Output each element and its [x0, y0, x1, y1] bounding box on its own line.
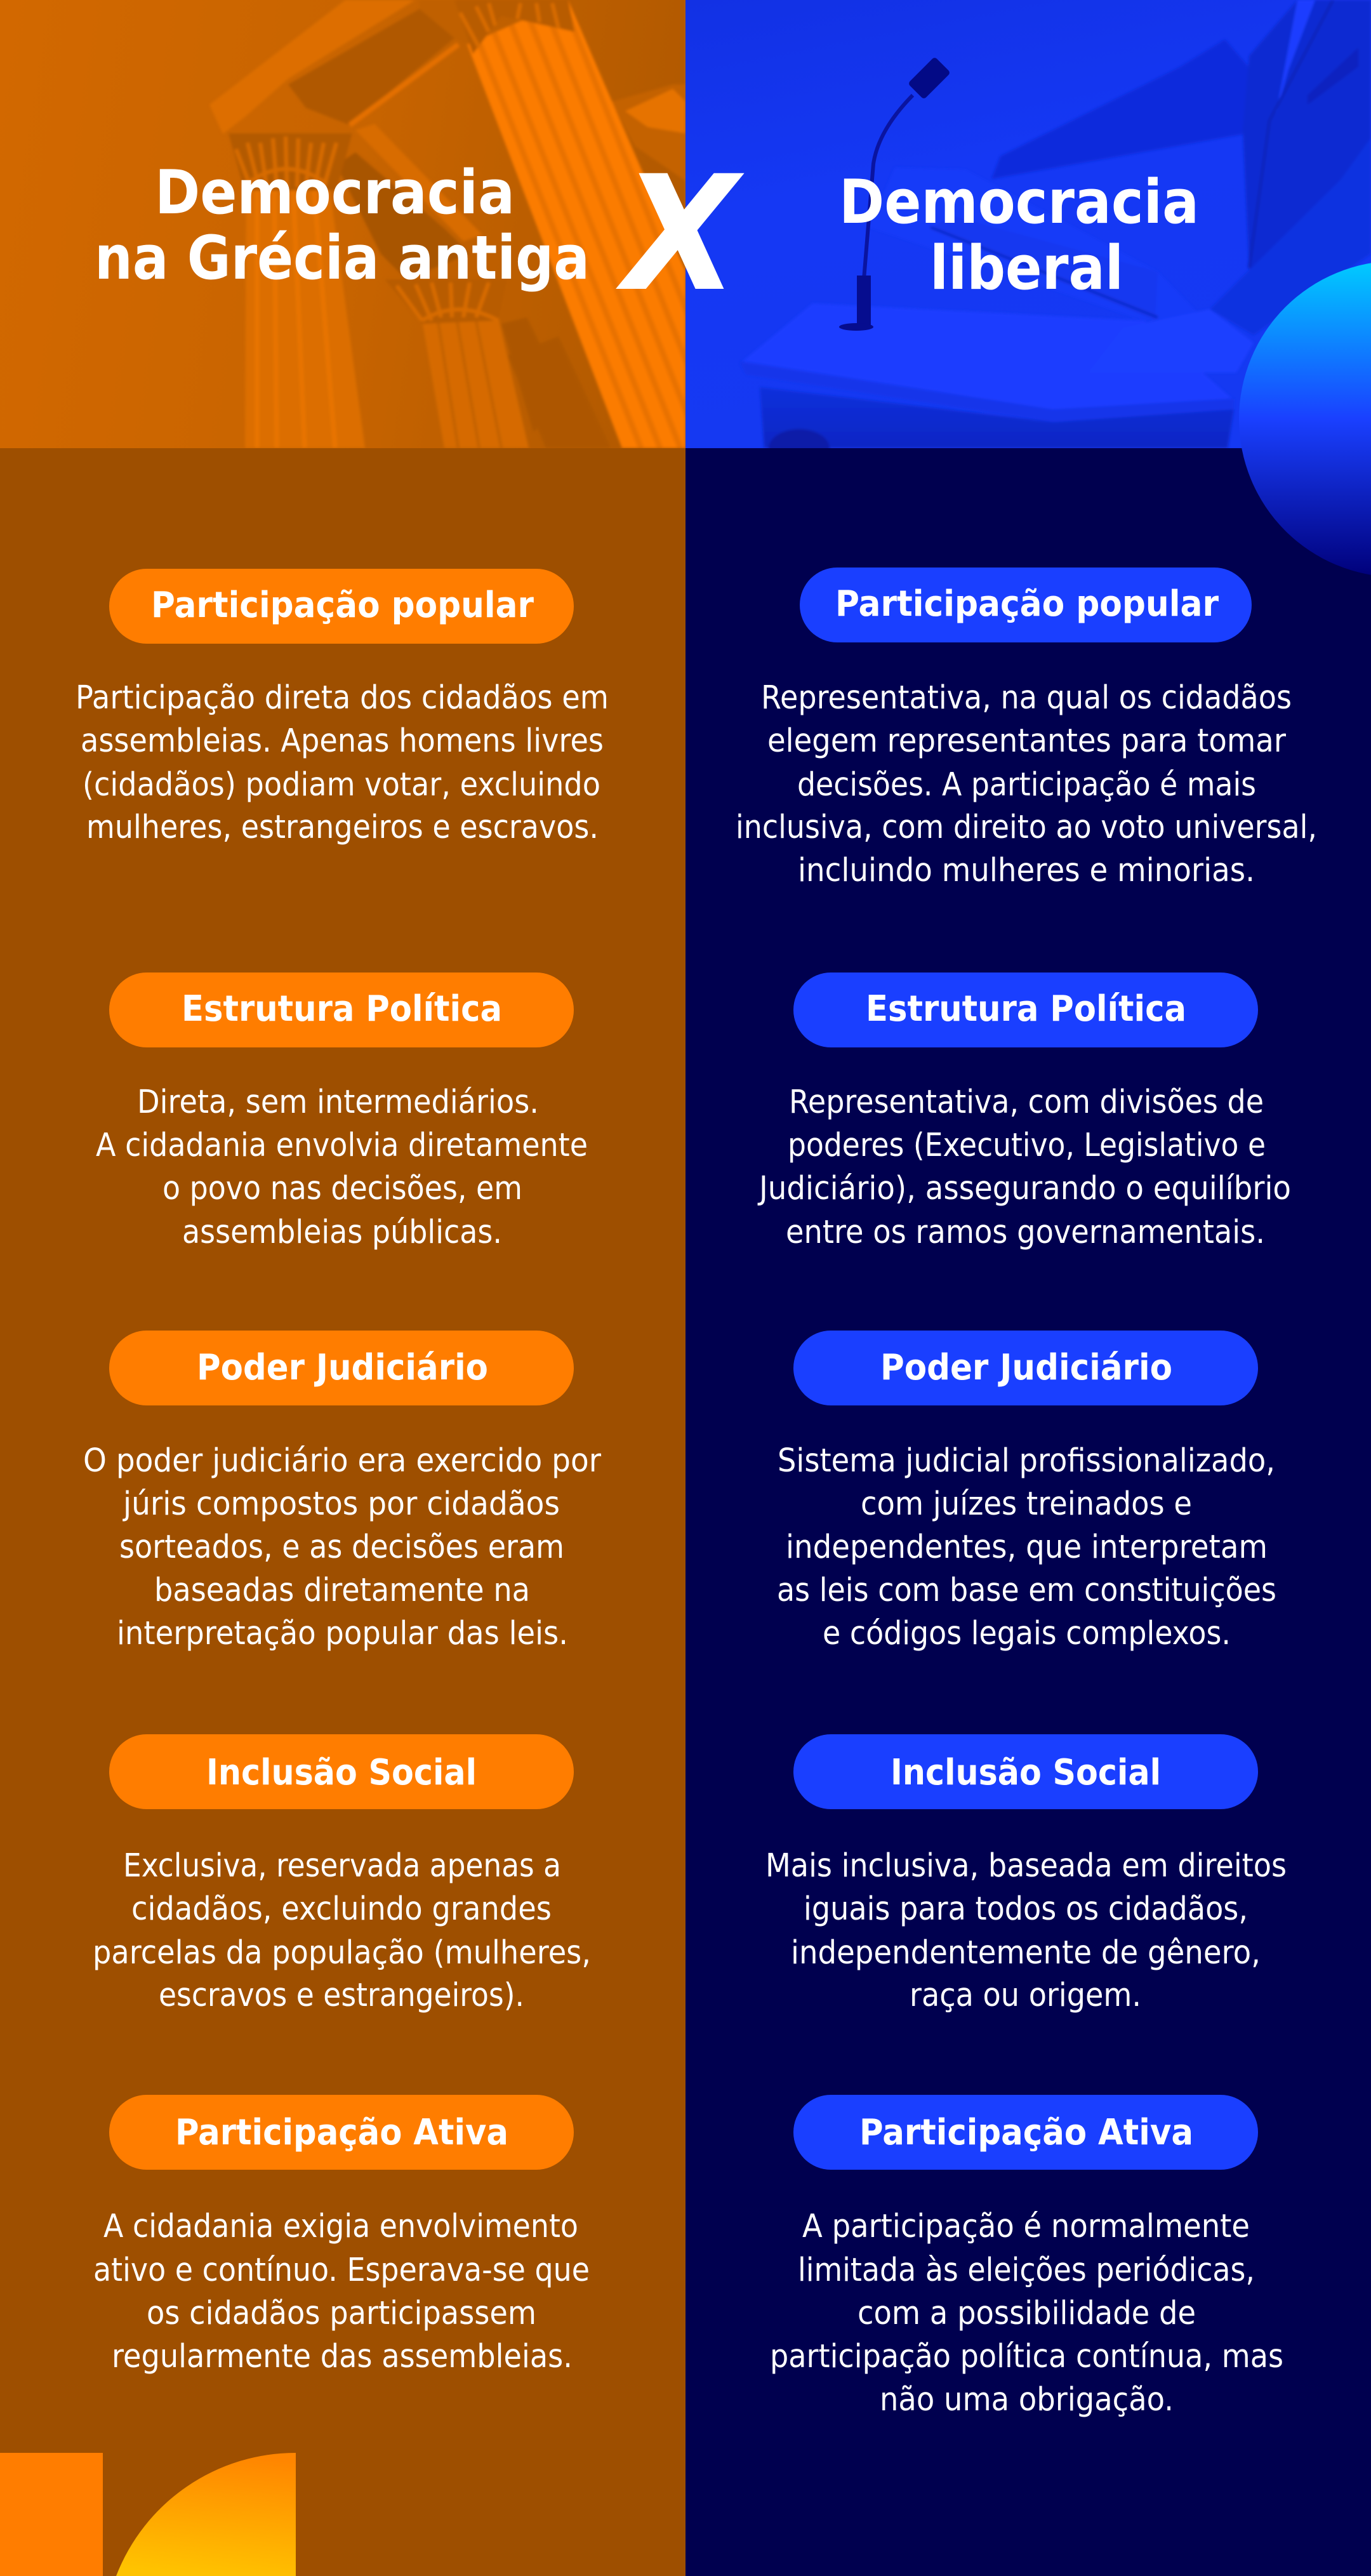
title: left: na Grécia antiga: [95, 223, 590, 293]
text block: baseadas diretamente na: [154, 1572, 530, 1609]
pill heading: [109, 2095, 574, 2170]
text block: [757, 1084, 1291, 1251]
title: left: [95, 158, 590, 293]
text block: com a possibilidade de: [858, 2295, 1196, 2332]
text block: A cidadania exigia envolvimento: [103, 2208, 578, 2245]
text block: [765, 1847, 1287, 2014]
text block: independentes, que interpretam: [786, 1529, 1268, 1566]
text block: interpretação popular das leis.: [117, 1615, 568, 1652]
text block: Mais inclusiva, baseada em direitos: [765, 1847, 1287, 1885]
pill heading: Estrutura Política: [182, 988, 502, 1030]
text block: com juízes treinados e: [861, 1485, 1192, 1523]
text block: [93, 1847, 591, 2014]
panel: left 5 participação ativa: [93, 2095, 590, 2375]
pill heading: [793, 973, 1258, 1047]
decorative gradient circle: [1239, 261, 1371, 577]
pill heading: [109, 1734, 574, 1809]
text block: os cidadãos participassem: [147, 2295, 536, 2332]
text block: O poder judiciário era exercido por: [83, 1442, 601, 1480]
text block: assembleias. Apenas homens livres: [81, 722, 604, 760]
text block: cidadãos, excluindo grandes: [131, 1890, 552, 1928]
text block: decisões. A participação é mais: [797, 766, 1256, 804]
text block: escravos e estrangeiros).: [159, 1977, 524, 2014]
text block: parcelas da população (mulheres,: [93, 1934, 591, 1972]
text block: assembleias públicas.: [182, 1214, 502, 1251]
pill heading: Participação Ativa: [859, 2112, 1193, 2153]
text block: Representativa, com divisões de: [789, 1084, 1264, 1121]
panel: right column background: [686, 0, 1371, 2576]
pill heading: Participação popular: [835, 583, 1219, 625]
title: left: Democracia: [155, 158, 515, 228]
text block: iguais para todos os cidadãos,: [804, 1890, 1248, 1928]
header photo: speaker at podium: [686, 0, 1371, 467]
text block: inclusiva, com direito ao voto universal,: [736, 809, 1317, 846]
title: right: [839, 168, 1199, 303]
text block: [93, 2208, 590, 2375]
text block: A cidadania envolvia diretamente: [96, 1127, 588, 1164]
pill heading: [800, 568, 1252, 642]
text block: sorteados, e as decisões eram: [119, 1529, 564, 1566]
text block: júris compostos por cidadãos: [123, 1485, 560, 1523]
pill heading: Inclusão Social: [891, 1752, 1161, 1793]
panel: left column background: [0, 0, 686, 2576]
decorative orange square: [0, 2453, 103, 2576]
text block: A participação é normalmente: [802, 2208, 1250, 2245]
text block: e códigos legais complexos.: [823, 1615, 1231, 1652]
text block: Participação direta dos cidadãos em: [76, 679, 609, 717]
title: right: liberal: [930, 234, 1123, 303]
text block: o povo nas decisões, em: [162, 1170, 522, 1207]
text block: Representativa, na qual os cidadãos: [761, 679, 1292, 717]
text block: [736, 679, 1317, 889]
text block: [96, 1084, 588, 1251]
panel: left 4 inclusão social: [93, 1734, 591, 2014]
text block: raça ou origem.: [910, 1977, 1141, 2014]
panel: right 2 estrutura política: [757, 973, 1291, 1251]
panel: right 4 inclusão social: [765, 1734, 1287, 2014]
text block: [770, 2208, 1283, 2419]
pill heading: Poder Judiciário: [197, 1347, 488, 1388]
pill heading: [793, 1734, 1258, 1809]
pill heading: Inclusão Social: [206, 1752, 477, 1793]
text block: incluindo mulheres e minorias.: [798, 852, 1255, 889]
text block: [76, 679, 609, 846]
text block: mulheres, estrangeiros e escravos.: [86, 809, 599, 846]
panel: right 1 participação popular: [736, 568, 1317, 889]
panel: left 3 poder judiciário: [83, 1331, 601, 1652]
text block: limitada às eleições periódicas,: [798, 2252, 1255, 2289]
text block: Direta, sem intermediários.: [137, 1084, 539, 1121]
pill heading: [793, 2095, 1258, 2170]
panel: right 5 participação ativa: [770, 2095, 1283, 2419]
panel: left 2 estrutura política: [96, 973, 588, 1251]
text block: independentemente de gênero,: [791, 1934, 1261, 1972]
pill heading: [109, 569, 574, 644]
text block: [777, 1442, 1276, 1652]
pill heading: [793, 1331, 1258, 1405]
title: right: Democracia: [839, 168, 1199, 237]
text block: Sistema judicial profissionalizado,: [778, 1442, 1275, 1480]
text block: participação política contínua, mas: [770, 2338, 1283, 2375]
text block: Exclusiva, reservada apenas a: [123, 1847, 561, 1885]
text block: ativo e contínuo. Esperava-se que: [93, 2252, 590, 2289]
text block: (cidadãos) podiam votar, excluindo: [83, 766, 600, 804]
pill heading: Participação popular: [151, 585, 534, 626]
text block: [83, 1442, 601, 1652]
text block: entre os ramos governamentais.: [786, 1214, 1265, 1251]
text block: não uma obrigação.: [880, 2381, 1174, 2419]
pill heading: Estrutura Política: [866, 988, 1186, 1030]
panel: left 1 participação popular: [76, 569, 609, 846]
text block: as leis com base em constituições: [777, 1572, 1276, 1609]
decorative yellow quarter circle: [116, 2453, 296, 2576]
text block: regularmente das assembleias.: [112, 2338, 573, 2375]
versus X mark: X: [616, 142, 745, 326]
header photo: greek temple columns: [0, 0, 762, 448]
text block: elegem representantes para tomar: [767, 722, 1286, 760]
pill heading: [109, 1331, 574, 1405]
text block: poderes (Executivo, Legislativo e: [788, 1127, 1266, 1164]
pill heading: Participação Ativa: [175, 2112, 508, 2153]
pill heading: [109, 973, 574, 1047]
pill heading: Poder Judiciário: [880, 1347, 1172, 1388]
text block: Judiciário), assegurando o equilíbrio: [757, 1170, 1291, 1207]
panel: right 3 poder judiciário: [777, 1331, 1276, 1652]
